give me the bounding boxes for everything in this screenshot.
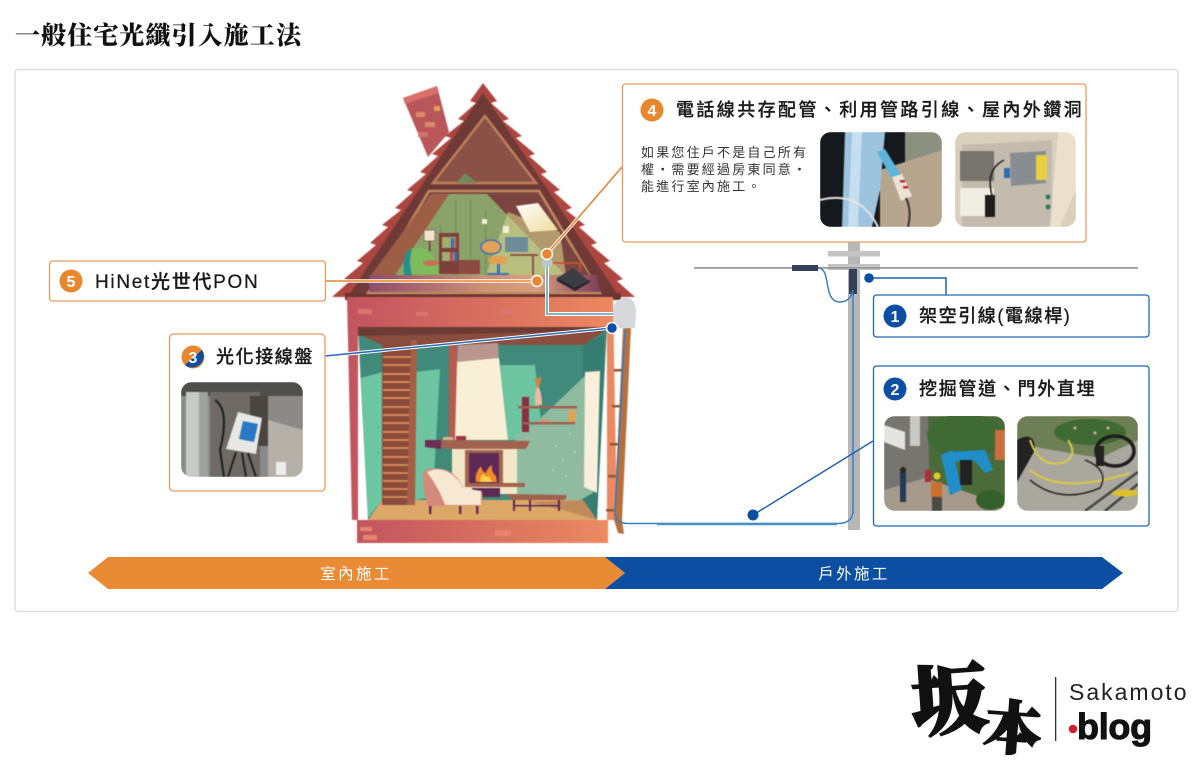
callout leader 2 [748, 441, 873, 520]
lower wall [347, 297, 617, 520]
house base [357, 520, 608, 543]
badge 3: 3 [189, 350, 198, 367]
badge 4: 4 [648, 103, 657, 120]
icon: house illustration [332, 83, 635, 543]
drain pipe [606, 328, 631, 534]
arrow: outdoor construction: 戶外施工 [818, 565, 890, 583]
photo: excavator at work [884, 413, 1005, 511]
badge 1 [884, 304, 906, 328]
panel: main diagram frame [15, 70, 1178, 612]
logo: Sakamoto blog [907, 638, 1189, 765]
callout leader 5 [326, 276, 542, 286]
living room [358, 327, 607, 520]
logo: Sakamoto blog: blog [1077, 706, 1152, 747]
heading 4: 電話線共存配管、利用管路引線、屋內外鑽洞 [676, 99, 1084, 120]
chimney [403, 86, 449, 157]
badge 2: 2 [891, 382, 900, 399]
badge 1: 1 [891, 309, 900, 326]
desk chair [481, 237, 538, 275]
upper attic triangle [433, 116, 536, 183]
title: 一般住宅光纖引入施工法 [15, 21, 304, 50]
photo: wall-mounted optical box [181, 382, 303, 477]
logo: Sakamoto blog: 坂 [907, 638, 991, 752]
panel: callout 4 [622, 84, 1086, 242]
heading 3: 光化接線盤 [216, 347, 314, 367]
panel: callout 5 [50, 261, 326, 301]
badge 3 [182, 346, 204, 368]
body text 4: 權・需要經過房東同意・ [641, 162, 808, 177]
badge 2 [884, 378, 906, 400]
arrow: indoor construction: 室內施工 [320, 565, 392, 583]
body text 4 [641, 145, 808, 194]
callout leader 4 [542, 167, 622, 267]
sofa and lamp [404, 230, 443, 275]
body text 4: 如果您住戶不是自己所有 [641, 145, 808, 160]
badge 5 [60, 270, 82, 292]
utility pole [694, 242, 1138, 530]
wall shelves and vase [518, 377, 577, 432]
panel: callout 1 [874, 295, 1149, 337]
attic room [368, 191, 600, 293]
optical network terminal [553, 263, 590, 291]
heading 5: HiNet光世代PON [95, 271, 259, 293]
callout leader 1 [864, 273, 946, 295]
logo: Sakamoto blog: Sakamoto [1069, 679, 1189, 705]
photo: wiring cabinet [955, 132, 1076, 227]
roof [332, 83, 635, 297]
staircase [382, 340, 417, 505]
badge 4 [640, 98, 664, 122]
icon: fiber distribution box on wall [613, 298, 636, 328]
arrow: indoor construction [88, 557, 625, 589]
heading 1: 架空引線(電線桿) [919, 306, 1071, 326]
panel: callout 2 [874, 366, 1149, 526]
dust specks [552, 433, 576, 477]
photo: cables on pavement [1017, 416, 1138, 511]
arrow: outdoor construction [605, 557, 1123, 589]
fireplace [425, 343, 530, 497]
bookshelf [439, 233, 480, 274]
photo: fiber connector and cable bundle [820, 132, 942, 227]
callout leader 3 [325, 322, 618, 356]
armchair [423, 468, 482, 514]
indoor cable [547, 266, 613, 314]
panel: callout 3 [170, 334, 325, 491]
badge 5: 5 [67, 274, 76, 291]
outdoor fiber cable [615, 268, 853, 524]
coffee table [506, 494, 567, 511]
heading 2: 挖掘管道、門外直埋 [919, 379, 1096, 399]
body text 4: 能進行室內施工。 [641, 179, 763, 194]
